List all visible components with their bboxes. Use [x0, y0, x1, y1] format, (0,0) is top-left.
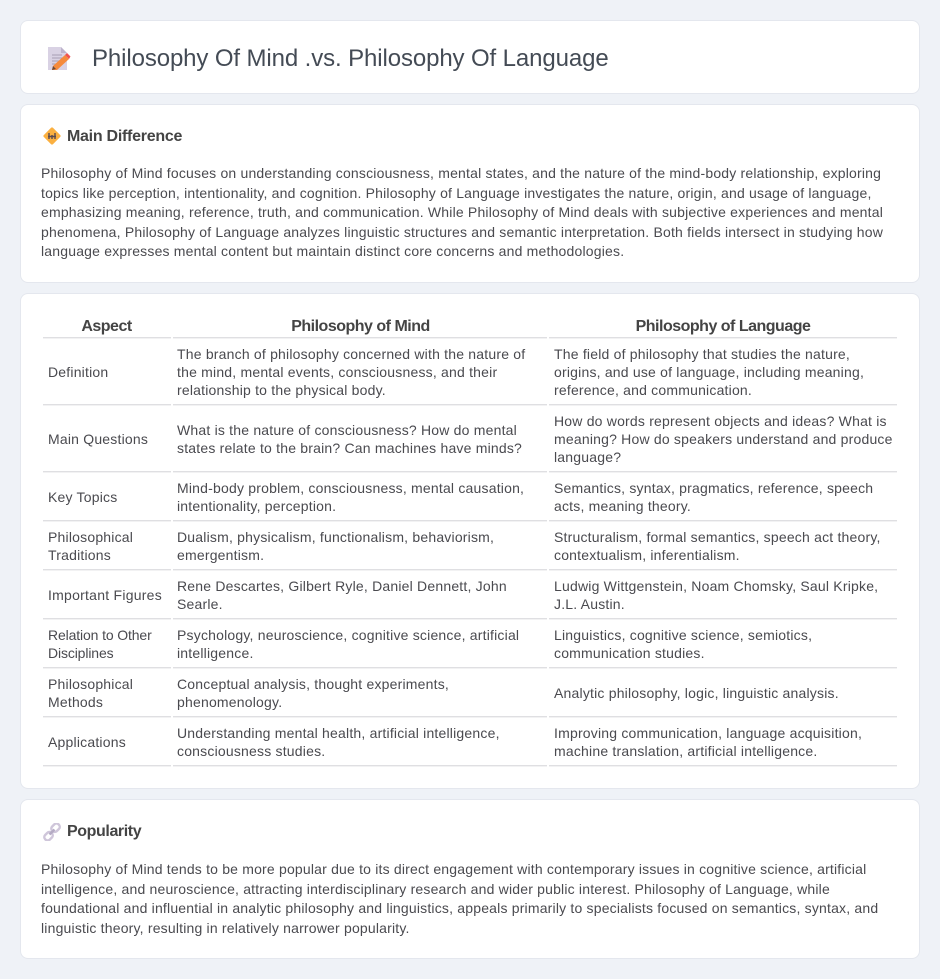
heading: main difference: Main Difference: [67, 128, 182, 145]
text: main difference paragraph: phenomena, Philosophy of Language analyzes linguistic structures and semantic interpretation. Both fields intersect in studying how: [41, 224, 883, 240]
row: key topics: Key Topics: [48, 489, 117, 505]
definition: language: [554, 346, 864, 398]
traditions: mind: emergentism.: [177, 547, 264, 563]
panel: popularity: [20, 799, 920, 959]
key topics: language: Semantics, syntax, pragmatics, reference, speech: [554, 480, 873, 496]
applications: language: machine translation, artificial intelligence.: [554, 743, 817, 759]
heading: popularity: Popularity: [67, 823, 141, 840]
text: popularity paragraph: foundational and influential in analytic philosophy and linguistics, appeals primarily to specialists focused on semantics, syntax, and: [41, 900, 878, 916]
disciplines: mind: Psychology, neuroscience, cognitive science, artificial: [177, 627, 519, 643]
figures: mind: Rene Descartes, Gilbert Ryle, Daniel Dennett, John: [177, 578, 507, 594]
applications: language: Improving communication, language acquisition,: [554, 725, 862, 741]
row: philosophical methods: Philosophical: [48, 676, 133, 692]
icon: document with pencil: [48, 47, 70, 70]
main questions: mind: [177, 422, 522, 456]
title: Philosophy Of Mind .vs. Philosophy Of Language: [92, 45, 609, 72]
key topics: language: [554, 480, 873, 514]
methods: mind: [177, 676, 449, 710]
disciplines: language: communication studies.: [554, 645, 705, 661]
row: philosophical traditions: Traditions: [48, 547, 111, 563]
row: relation to other disciplines: Disciplines: [48, 645, 113, 661]
main questions: mind: states relate to the brain? Can machines have minds?: [177, 440, 522, 456]
definition: language: origins, and use of language, including meaning,: [554, 364, 864, 380]
row: relation to other disciplines: [48, 627, 152, 661]
text: popularity paragraph: linguistic theory, resulting in relatively narrower popularity.: [41, 920, 410, 936]
applications: mind: consciousness studies.: [177, 743, 325, 759]
definition: mind: relationship to the physical body.: [177, 382, 386, 398]
text: main difference paragraph: [41, 165, 883, 259]
figures: mind: Searle.: [177, 596, 223, 612]
text: main difference paragraph: Philosophy of Mind focuses on understanding consciousness, mental states, and the nature of the mind-body relationship, exploring: [41, 165, 881, 181]
definition: language: The field of philosophy that studies the nature,: [554, 346, 850, 362]
methods: mind: Conceptual analysis, thought experiments,: [177, 676, 449, 692]
figures: language: [554, 578, 878, 612]
text: main difference paragraph: emphasizing meaning, reference, truth, and communication. While Philosophy of Mind deals with subjective experiences and mental: [41, 204, 883, 220]
panel: main difference: [20, 104, 920, 283]
row: important figures: Important Figures: [48, 587, 162, 603]
methods: mind: phenomenology.: [177, 694, 282, 710]
traditions: language: [554, 529, 881, 563]
row: main questions: Main Questions: [48, 431, 148, 447]
panel: comparison table: [20, 293, 920, 789]
main questions: language: How do words represent objects and ideas? What is: [554, 413, 887, 429]
text: popularity paragraph: [41, 861, 878, 936]
applications: mind: Understanding mental health, artificial intelligence,: [177, 725, 500, 741]
row: relation to other disciplines: Relation to Other: [48, 627, 152, 643]
disciplines: mind: intelligence.: [177, 645, 254, 661]
main questions: language: [554, 413, 893, 465]
disciplines: mind: [177, 627, 519, 661]
row: philosophical traditions: [48, 529, 133, 563]
definition: language: reference, and communication.: [554, 382, 752, 398]
row: philosophical methods: [48, 676, 133, 710]
key topics: mind: Mind-body problem, consciousness, mental causation,: [177, 480, 524, 496]
definition: mind: The branch of philosophy concerned with the nature of: [177, 346, 525, 362]
text: popularity paragraph: intelligence, and neuroscience, attracting interdisciplinary research and wider public interest. Philosophy of Language, while: [41, 880, 830, 896]
text: main difference paragraph: language expresses mental content but maintain distinct core concerns and methodologies.: [41, 243, 624, 259]
traditions: mind: [177, 529, 494, 563]
row: philosophical traditions: Philosophical: [48, 529, 133, 545]
figures: language: Ludwig Wittgenstein, Noam Chomsky, Saul Kripke,: [554, 578, 878, 594]
row: philosophical methods: Methods: [48, 694, 103, 710]
key topics: language: acts, meaning theory.: [554, 498, 691, 514]
disciplines: language: Linguistics, cognitive science, semiotics,: [554, 627, 812, 643]
main questions: language: language?: [554, 449, 621, 465]
traditions: language: Structuralism, formal semantics, speech act theory,: [554, 529, 881, 545]
row: definition: Definition: [48, 364, 108, 380]
key topics: mind: intentionality, perception.: [177, 498, 336, 514]
traditions: mind: Dualism, physicalism, functionalism, behaviorism,: [177, 529, 494, 545]
disciplines: language: [554, 627, 812, 661]
methods: language: Analytic philosophy, logic, linguistic analysis.: [554, 685, 839, 701]
row: applications: Applications: [48, 734, 126, 750]
text: popularity paragraph: Philosophy of Mind tends to be more popular due to its direct engagement with contemporary issues in cognitive science, artificial: [41, 861, 866, 877]
main questions: mind: What is the nature of consciousness? How do mental: [177, 422, 517, 438]
text: main difference paragraph: topics like perception, intentionality, and cognition. Philosophy of Language investigates the nature, origin, and usage of language,: [41, 184, 872, 200]
traditions: language: contextualism, inferentialism.: [554, 547, 740, 563]
applications: mind: [177, 725, 500, 759]
figures: language: J.L. Austin.: [554, 596, 625, 612]
icon: chain link: [43, 823, 61, 841]
key topics: mind: [177, 480, 524, 514]
definition: mind: [177, 346, 526, 398]
icon: diamond sign: [43, 127, 61, 145]
figures: mind: [177, 578, 507, 612]
main questions: language: meaning? How do speakers understand and produce: [554, 431, 893, 447]
table header: philosophy of language: Philosophy of Language: [636, 318, 810, 335]
applications: language: [554, 725, 862, 759]
table header: philosophy of mind: Philosophy of Mind: [291, 318, 430, 335]
panel: title card: [20, 20, 920, 94]
table header: aspect: Aspect: [81, 318, 132, 335]
definition: mind: the mind, mental events, consciousness, and their: [177, 364, 497, 380]
